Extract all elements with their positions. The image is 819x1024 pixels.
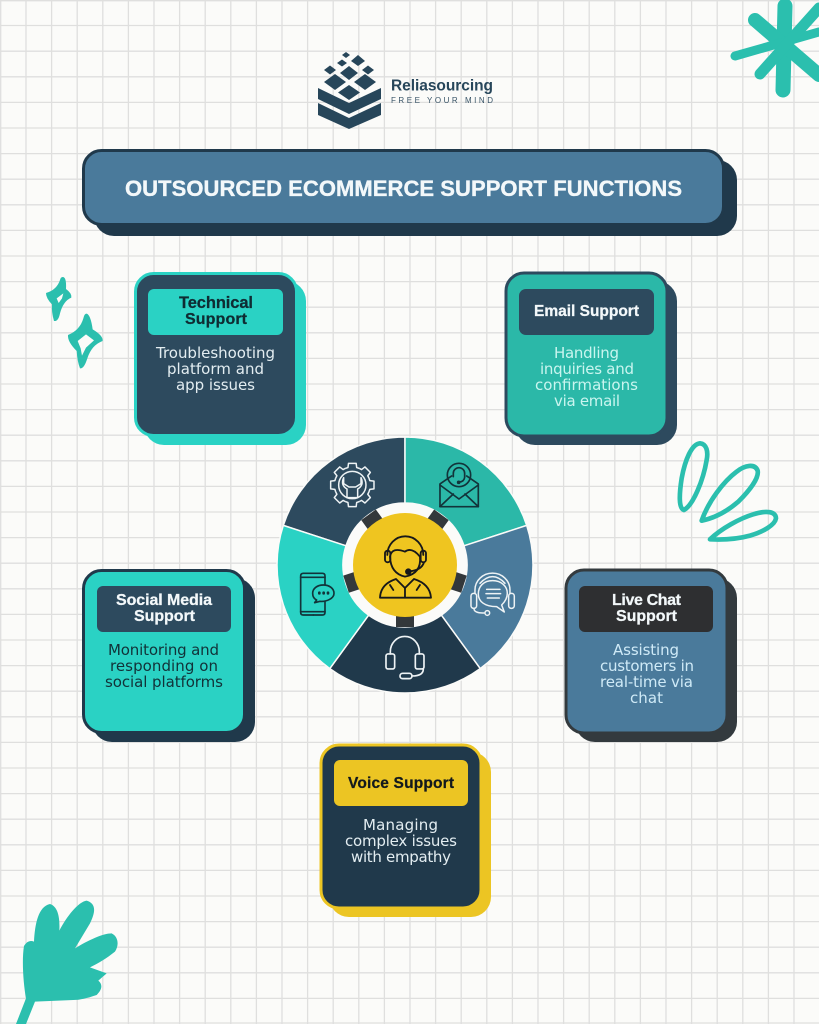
heading: Email Support <box>519 289 654 335</box>
text: Technical description <box>155 344 275 394</box>
text: Email description: inquiries and <box>540 360 634 378</box>
text: Live Chat description: chat <box>630 689 663 707</box>
text: Live Chat description <box>600 641 694 707</box>
heading: Social Media Support: Social Media <box>116 592 212 609</box>
segment: email <box>405 437 527 546</box>
card: Social Media Support <box>84 570 255 742</box>
logo tagline: FREE YOUR MIND <box>391 96 493 105</box>
central wheel diagram <box>277 437 533 693</box>
text: Technical description: Troubleshooting <box>155 344 275 362</box>
heading: Live Chat Support: Live Chat <box>612 592 682 609</box>
text: Email description: via email <box>554 392 620 410</box>
title text: OUTSOURCED ECOMMERCE SUPPORT FUNCTIONS <box>125 176 682 201</box>
card: Voice Support <box>321 745 491 917</box>
text: Social description: Monitoring and <box>108 641 219 659</box>
text: Voice description: with empathy <box>351 848 451 866</box>
text: Live Chat description: real-time via <box>600 673 693 691</box>
text: Email description: Handling <box>554 344 619 362</box>
segment: technical <box>283 437 405 546</box>
decoration: leaf bottom left <box>16 901 118 1024</box>
text: Social description: responding on <box>110 657 218 675</box>
text: Technical description: platform and <box>167 360 264 378</box>
heading: Social Media Support <box>97 586 231 632</box>
logo: Reliasourcing <box>318 52 493 129</box>
icon: gear wrench <box>331 463 374 507</box>
heading: Technical Support: Support <box>185 311 248 328</box>
icon: phone with chat bubble <box>301 573 334 615</box>
icon: email with headset <box>440 463 478 507</box>
logo wordmark: Reliasourcing <box>391 78 493 94</box>
heading: Voice Support <box>334 760 468 806</box>
title banner <box>84 150 737 236</box>
icon: agent with headset <box>380 536 431 598</box>
segment: social <box>277 525 369 669</box>
segment: live chat <box>441 525 533 669</box>
decoration: petals <box>680 443 776 540</box>
segment: voice <box>330 615 480 693</box>
text: Voice description: complex issues <box>345 832 457 850</box>
card: Email Support <box>506 273 677 445</box>
card: Technical Support <box>136 274 306 445</box>
text: Live Chat description: customers in <box>600 657 694 675</box>
text: Social description <box>105 641 223 691</box>
decoration: star top right <box>735 6 819 90</box>
decoration: sparkles <box>46 277 103 368</box>
heading: Voice Support: Voice Support <box>348 775 454 792</box>
logo icon: stacked layers <box>318 52 381 129</box>
text: Social description: social platforms <box>105 673 223 691</box>
text: Email description <box>535 344 638 410</box>
icon: chat headset <box>471 573 514 615</box>
heading: Technical Support <box>148 289 283 335</box>
text: Voice description: Managing <box>363 816 438 834</box>
heading: Email Support: Email Support <box>534 303 639 320</box>
centre hub <box>353 513 457 617</box>
heading: Live Chat Support <box>579 586 713 632</box>
text: Email description: confirmations <box>535 376 638 394</box>
heading: Social Media Support: Support <box>134 608 196 625</box>
card: Live Chat Support <box>566 570 737 742</box>
text: Voice description <box>345 816 457 866</box>
heading: Live Chat Support: Support <box>616 608 678 625</box>
text: Technical description: app issues <box>176 376 255 394</box>
heading: Technical Support: Technical <box>179 294 253 312</box>
icon: headset <box>386 636 424 679</box>
text: Live Chat description: Assisting <box>613 641 679 659</box>
